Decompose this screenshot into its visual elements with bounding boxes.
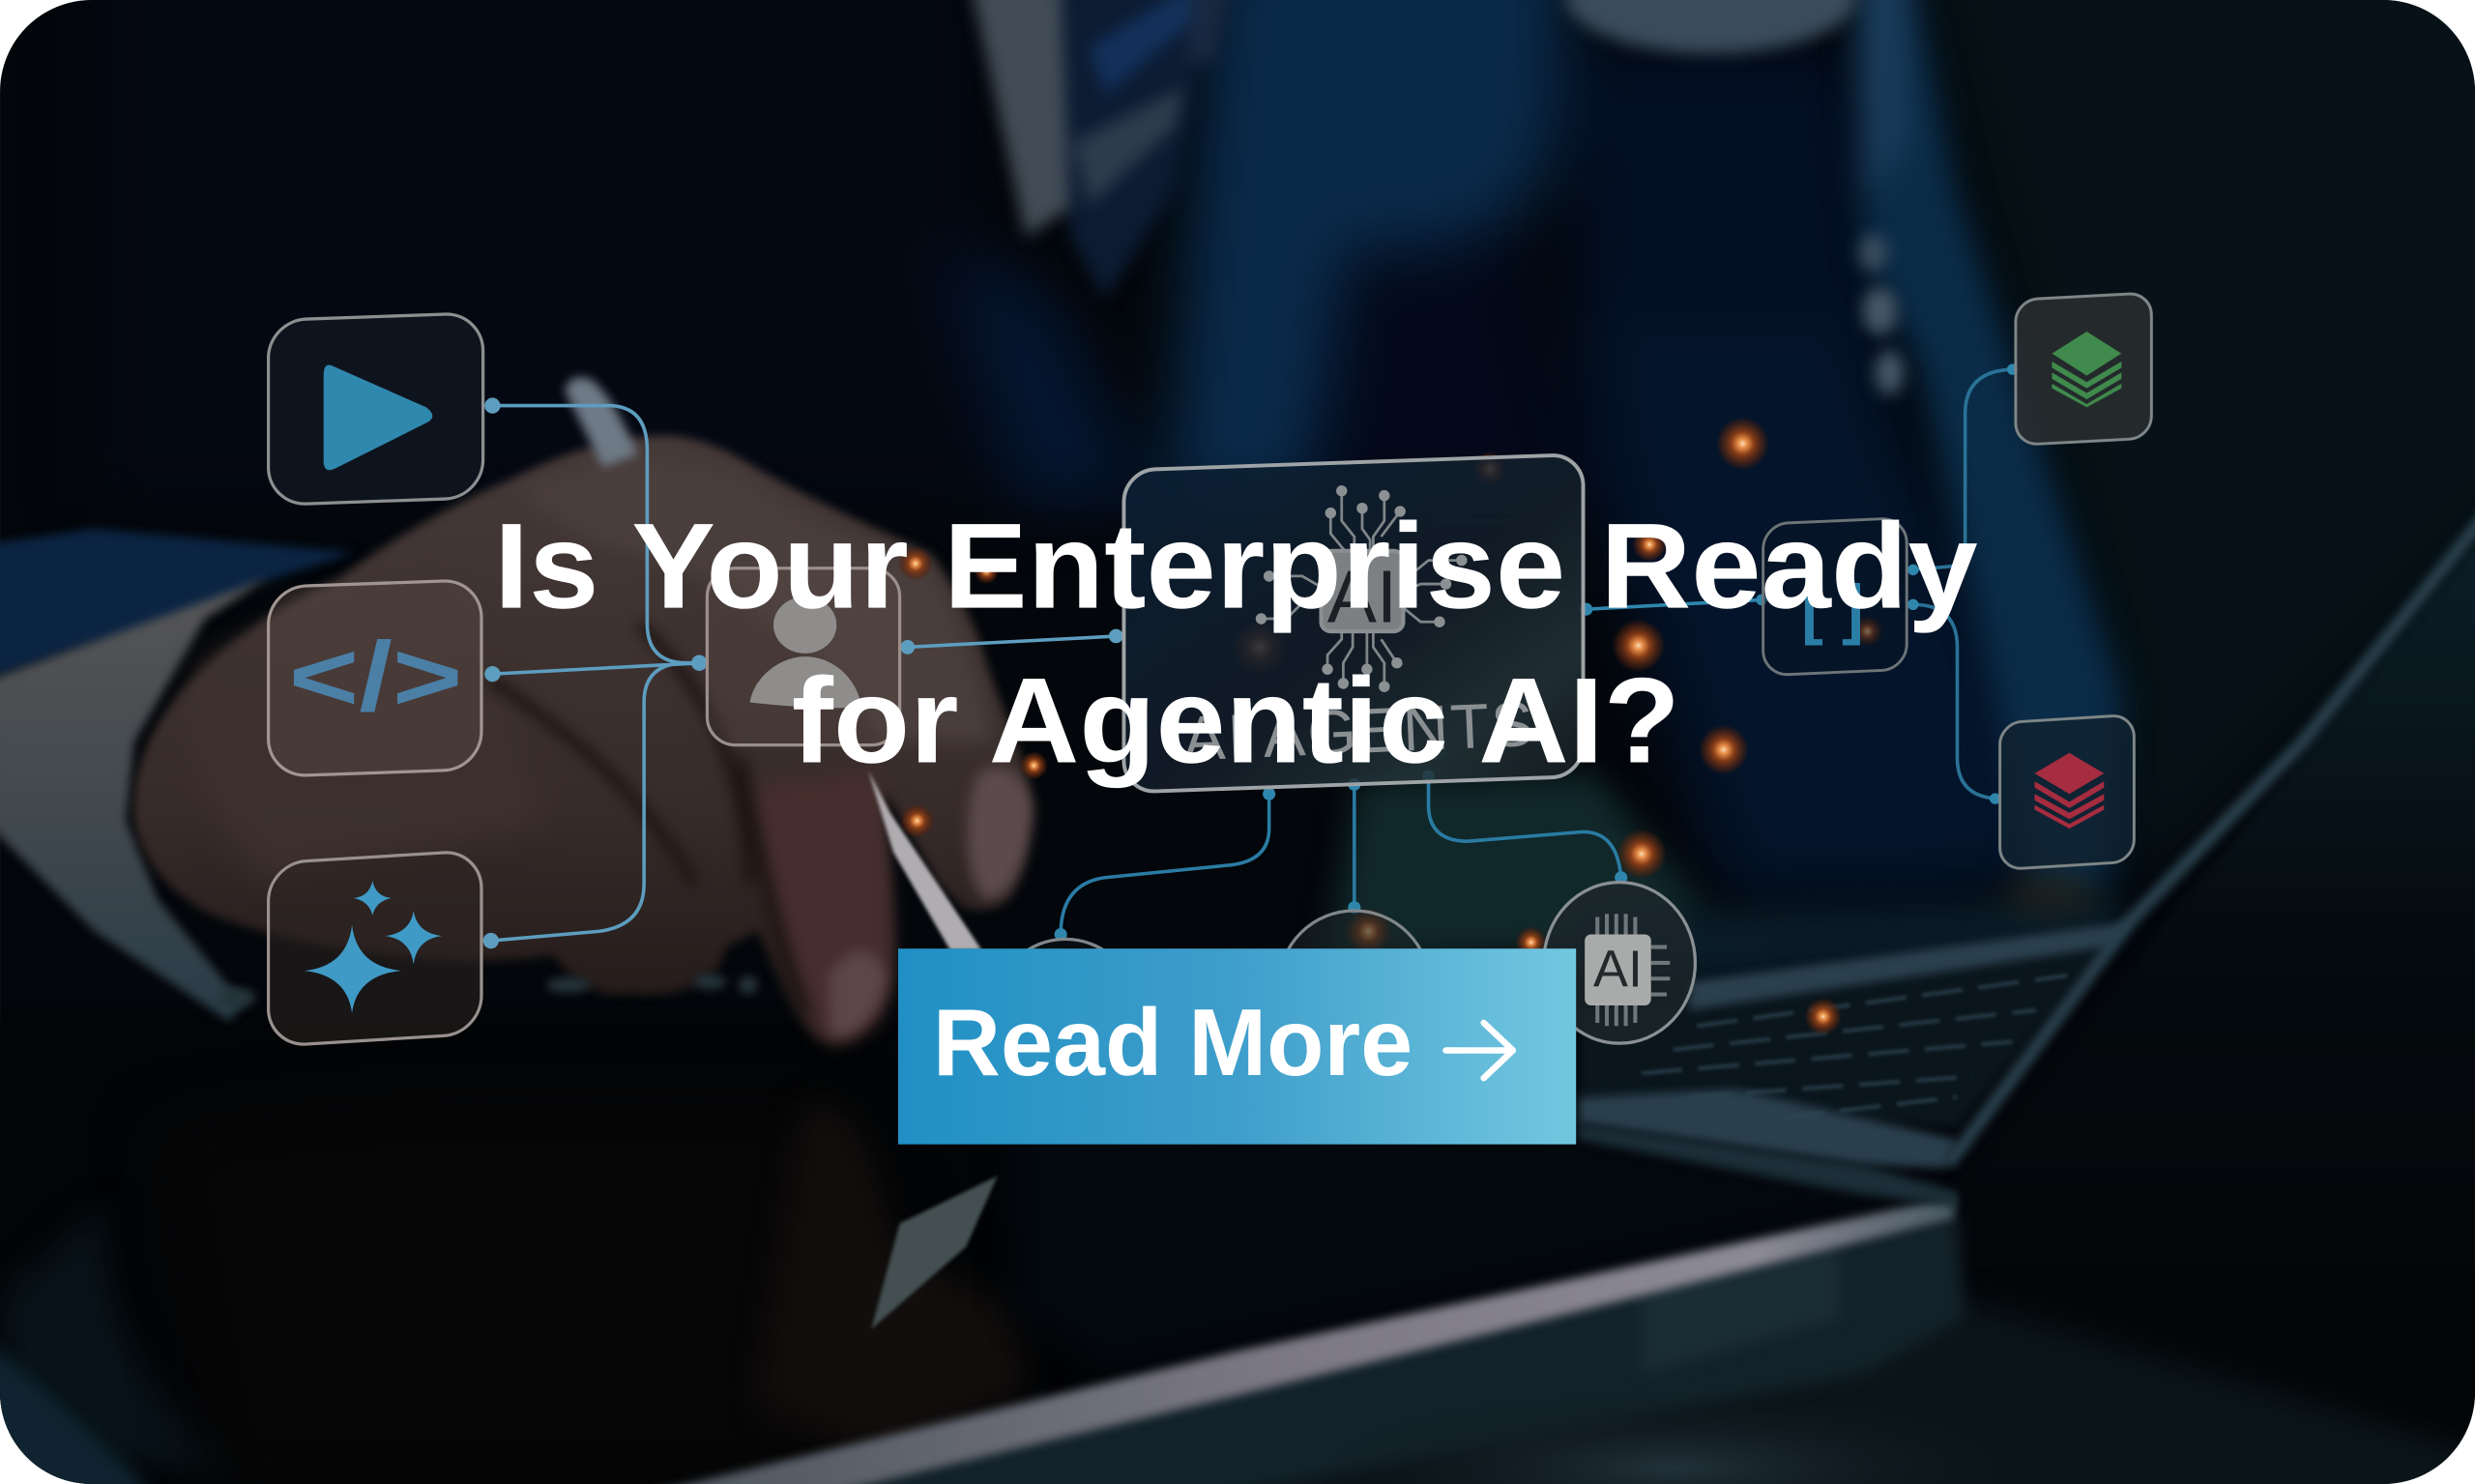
icon: AI chip circuit xyxy=(1256,485,1468,692)
button label: Read More xyxy=(933,989,1412,1095)
glowing particles xyxy=(898,417,1883,1035)
circle node: AI chip xyxy=(1544,883,1695,1043)
card: sparkles xyxy=(269,851,481,1046)
icon: play triangle xyxy=(324,365,432,470)
laptop and keyboard xyxy=(1579,505,2475,1208)
chip label: AI xyxy=(1327,556,1397,638)
shirt and tie xyxy=(971,0,1904,394)
hand xyxy=(133,435,1034,1045)
card: AI agents xyxy=(1123,454,1584,793)
reflective desk and tablet xyxy=(0,544,2475,1484)
agent label: AI AGENTS xyxy=(1181,688,1534,774)
icon: green layers xyxy=(2052,332,2121,407)
circle node: left xyxy=(995,939,1137,1081)
card: code xyxy=(269,580,481,776)
card: green stack xyxy=(2016,293,2151,445)
icon: red layers xyxy=(2034,753,2104,829)
connector lines xyxy=(483,364,2018,948)
card: play xyxy=(269,313,483,505)
card: red stack xyxy=(2000,714,2134,870)
icon: code brackets: </> xyxy=(289,623,462,732)
title: Is Your Enterprise Ready xyxy=(494,498,1978,634)
sleeve and cuff xyxy=(0,529,355,1021)
button: read more xyxy=(898,948,1576,1145)
chip text: AI xyxy=(1593,940,1643,998)
icon: person xyxy=(750,597,861,708)
icon: braces: [ ] xyxy=(1801,571,1864,646)
card: person xyxy=(707,568,900,745)
icon: arrow xyxy=(1446,1023,1513,1078)
title: for Agentic AI? xyxy=(792,653,1680,789)
icon: sparkles xyxy=(305,881,442,1013)
blurred lights on desk xyxy=(218,974,758,1007)
circle node: centre xyxy=(1278,911,1430,1062)
title xyxy=(494,498,1978,789)
card: braces xyxy=(1763,518,1907,676)
keyboard keys xyxy=(1642,975,2068,1118)
stylus pen xyxy=(565,377,998,1329)
